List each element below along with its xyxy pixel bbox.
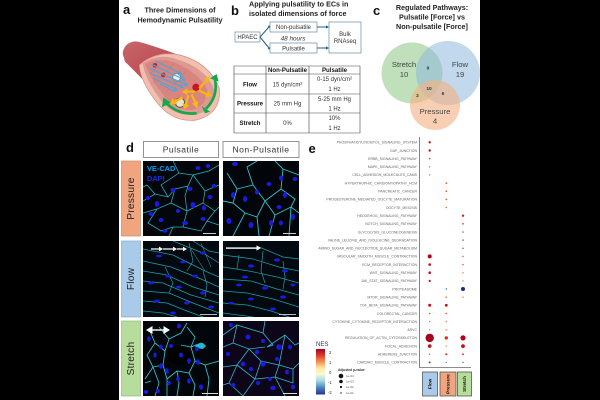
stain legend DAPI: DAPI xyxy=(147,174,165,183)
NES colour legend: 0 xyxy=(329,370,332,375)
column label Pressure xyxy=(440,372,456,396)
conditions table: Stretch xyxy=(240,120,261,127)
panel letter d: d xyxy=(126,140,134,155)
conditions table: 0% xyxy=(283,121,293,127)
label 48 hours: 48 hours xyxy=(281,36,306,42)
pathway labels: VASCULAR_SMOOTH_MUSCLE_CONTRACTION xyxy=(337,255,417,259)
column header Pulsatile xyxy=(144,142,218,158)
pathway labels: FOCAL_ADHESION xyxy=(385,344,417,348)
arrows xyxy=(260,25,329,50)
pathway labels: MTOR_SIGNALING_PATHWAY xyxy=(367,296,418,300)
icon: green stretch arrows xyxy=(167,79,216,114)
pathway labels: CELL_ADHESION_MOLECULES_CAMS xyxy=(352,173,418,177)
micrograph: pressure non-pulsatile xyxy=(223,161,299,236)
flow diagram xyxy=(235,22,361,53)
venn circles: 10 xyxy=(426,86,432,92)
NES colour legend: -1 xyxy=(328,380,332,385)
column label Flow: Flow xyxy=(428,378,432,389)
heading b: isolated dimensions of force xyxy=(249,9,346,18)
pathway labels: HYPERTROPHIC_CARDIOMYOPATHY_HCM xyxy=(345,181,417,185)
NES colour legend: NES xyxy=(316,342,328,348)
scale bar xyxy=(203,233,216,234)
conditions table: 1 Hz xyxy=(328,106,341,112)
NES colour legend: 2 xyxy=(329,350,332,355)
pathway labels: AMINO_SUGAR_AND_NUCLEOTIDE_SUGAR_METABOLISM xyxy=(318,247,417,251)
pathway labels: WNT_SIGNALING_PATHWAY xyxy=(370,271,418,275)
column label Stretch: Stretch xyxy=(462,376,467,392)
scale bar xyxy=(283,393,297,394)
conditions table: 1 Hz xyxy=(328,126,341,132)
pathway labels: CYTOKINE_CYTOKINE_RECEPTOR_INTERACTION xyxy=(332,320,417,324)
row label Stretch: Stretch xyxy=(126,342,137,375)
venn circles: 4 xyxy=(433,116,438,126)
pathway labels: NOTCH_SIGNALING_PATHWAY xyxy=(365,222,418,226)
column header Non-Pulsatile: Non-Pulsatile xyxy=(233,144,289,154)
pathway labels: ADHERENS_JUNCTION xyxy=(378,352,417,356)
NES colour legend: 1 xyxy=(329,360,332,365)
box Bulk RNAseq xyxy=(329,22,361,53)
pathway labels: ERBB_SIGNALING_PATHWAY xyxy=(368,157,418,161)
pathway labels: PANCREATIC_CANCER xyxy=(378,190,417,194)
venn circles: Stretch xyxy=(392,60,416,69)
row label Flow: Flow xyxy=(126,267,137,290)
pathway labels xyxy=(318,141,418,365)
pathway labels: COLORECTAL_CANCER xyxy=(377,312,417,316)
pathway labels: OOCYTE_MEIOSIS xyxy=(386,206,418,210)
micrograph: pressure pulsatile xyxy=(143,161,219,236)
icon: blue flow arrows xyxy=(149,61,187,92)
conditions table: 25 mm Hg xyxy=(274,102,301,108)
conditions table: Pressure xyxy=(237,100,264,108)
column label Flow xyxy=(422,372,438,396)
scale bar xyxy=(279,314,296,315)
panel letter e: e xyxy=(308,141,316,156)
stain legend: VE-CAD xyxy=(147,164,176,173)
icon: yellow pressure arrows xyxy=(170,77,212,109)
panel d: microscopy grid xyxy=(122,140,299,396)
scale bar xyxy=(283,233,296,234)
pathway labels: ECM_RECEPTOR_INTERACTION xyxy=(362,263,417,267)
column label Pressure: Pressure xyxy=(446,374,450,394)
plot axes xyxy=(420,137,471,368)
micrograph: stretch non-pulsatile xyxy=(223,321,299,396)
conditions table: 15 dyn/cm² xyxy=(273,82,302,88)
venn circles: Flow xyxy=(452,60,469,69)
box Pulsatile: Pulsatile xyxy=(282,46,305,52)
adjusted p-value size legend: 1e-01 xyxy=(346,391,354,395)
micrograph: stretch pulsatile xyxy=(143,321,219,396)
NES colour legend xyxy=(316,342,332,395)
pathway labels: PROTEASOME xyxy=(392,287,418,291)
venn circles: 2 xyxy=(416,93,419,99)
pathway labels: VALINE_LEUCINE_AND_ISOLEUCINE_DEGRADATION xyxy=(328,238,417,242)
pathway labels: JAK_STAT_SIGNALING_PATHWAY xyxy=(361,279,418,283)
plot dots xyxy=(426,141,466,363)
box Bulk RNAseq: Bulk xyxy=(339,32,352,38)
micrograph: flow non-pulsatile xyxy=(223,241,299,317)
box HPAEC: HPAEC xyxy=(237,35,258,41)
icon: steady flow arrow xyxy=(226,245,261,251)
pathway labels: HEDGEHOG_SIGNALING_PATHWAY xyxy=(357,214,418,218)
pathway labels: MAPK_SIGNALING_PATHWAY xyxy=(368,165,418,169)
pathway labels: GAP_JUNCTION xyxy=(390,149,417,153)
box Non-pulsatile: Non-pulsatile xyxy=(276,25,312,31)
column label Stretch xyxy=(458,372,472,396)
venn circles xyxy=(382,41,480,130)
icon: stretch double arrow xyxy=(146,326,170,334)
pathway labels: PHOSPHATIDYLINOSITOL_SIGNALING_SYSTEM xyxy=(337,141,417,145)
conditions table: 5-25 mm Hg xyxy=(318,97,351,103)
row label Stretch xyxy=(122,321,140,396)
panel a: hemodynamic pulsatility xyxy=(123,2,223,120)
micrograph: flow pulsatile xyxy=(143,241,219,317)
pathway labels: PROGESTERONE_MEDIATED_OOCYTE_MATURATION xyxy=(326,198,417,202)
pathway labels: ARVC xyxy=(407,328,417,332)
conditions table: Pulsatile xyxy=(322,67,348,74)
scale bar xyxy=(200,314,217,315)
panel e: pathway dot plot xyxy=(308,137,472,396)
panel b: experimental design xyxy=(231,0,361,133)
conditions table: 1 Hz xyxy=(328,87,341,93)
row label Flow xyxy=(122,241,140,317)
panel letter a: a xyxy=(123,2,131,17)
heading a: Hemodynamic Pulsatility xyxy=(137,16,223,24)
pathway labels: GLYCOLYSIS_GLUCONEOGENESIS xyxy=(358,230,418,234)
row label Pressure: Pressure xyxy=(126,177,137,220)
column header Non-Pulsatile xyxy=(223,142,299,158)
adjusted p-value size legend: 1e-02 xyxy=(346,385,354,389)
heading c: Regulated Pathways: xyxy=(396,3,468,12)
adjusted p-value size legend: Adjusted p-value xyxy=(338,368,365,372)
pathway labels: TGF_BETA_SIGNALING_PATHWAY xyxy=(360,304,418,308)
venn circles: Pressure xyxy=(420,107,450,116)
icon: pulsatile flow arrows xyxy=(151,247,187,251)
pathway labels: CARDIAC_MUSCLE_CONTRACTION xyxy=(357,361,417,365)
conditions table: 0-15 dyn/cm² xyxy=(317,77,352,83)
adjusted p-value size legend: 1e-04 xyxy=(346,374,354,378)
adjusted p-value size legend: 1e-03 xyxy=(346,380,354,384)
conditions table: Flow xyxy=(243,82,257,88)
box Bulk RNAseq: RNAseq xyxy=(334,39,356,45)
venn circles: 9 xyxy=(427,66,430,72)
page background xyxy=(119,0,480,400)
venn circles: 19 xyxy=(456,70,464,79)
conditions table: 10% xyxy=(328,116,341,122)
heading c: Non-pulsatile [Force] xyxy=(396,22,468,31)
panel c: venn diagram xyxy=(373,3,480,130)
conditions table: Non-Pulsatile xyxy=(268,67,308,74)
illustration: blood vessel with force arrows xyxy=(123,41,220,120)
heading c: Pulsatile [Force] vs xyxy=(399,12,465,22)
row label Pressure xyxy=(122,161,140,236)
NES colour legend: -2 xyxy=(328,390,332,395)
adjusted p-value size legend xyxy=(338,368,365,395)
panel letter c: c xyxy=(373,3,380,18)
venn circles: 6 xyxy=(442,91,445,97)
venn circles: 10 xyxy=(400,70,408,79)
column header Pulsatile: Pulsatile xyxy=(163,144,199,154)
pathway labels: REGULATION_OF_ACTIN_CYTOSKELETON xyxy=(345,336,417,340)
scale bar xyxy=(202,393,218,394)
conditions table xyxy=(234,66,360,133)
panel letter b: b xyxy=(231,3,239,18)
heading a: Three Dimensions of xyxy=(144,6,216,14)
